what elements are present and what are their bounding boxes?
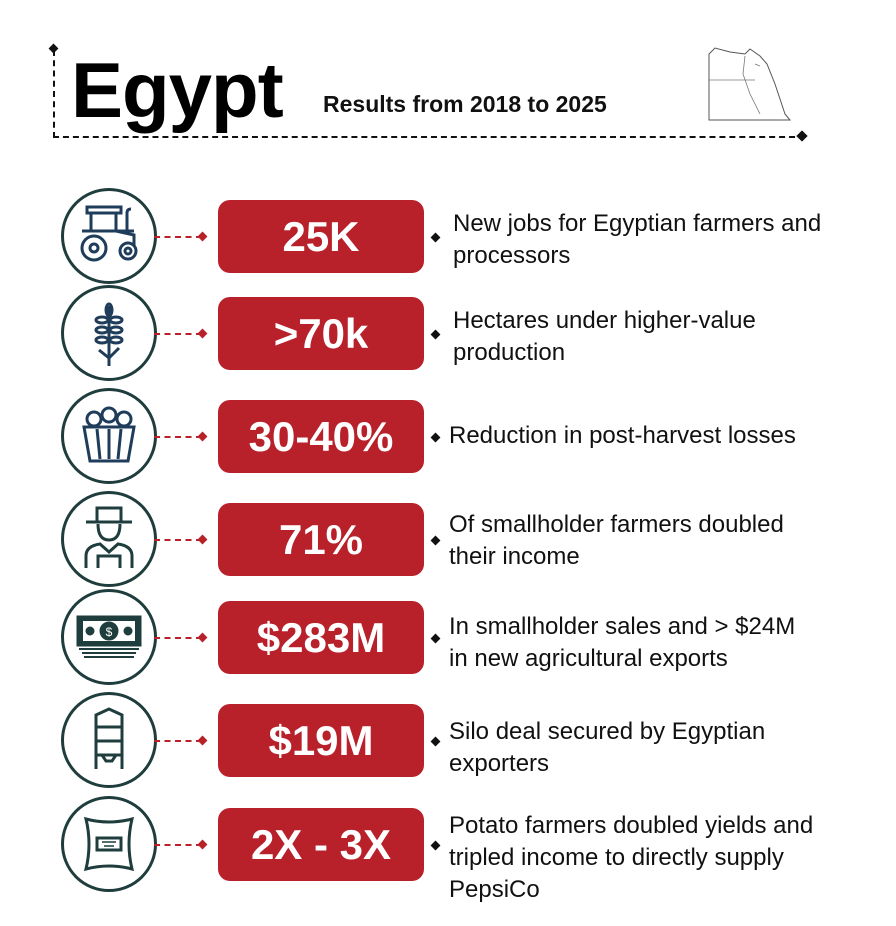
row 5 (61, 589, 795, 685)
text: in new agricultural exports (449, 645, 728, 672)
text: Of smallholder farmers doubled (449, 511, 784, 538)
text: New jobs for Egyptian farmers and (453, 210, 821, 237)
icon: money: $ (106, 625, 113, 639)
stat: 2X - 3X: 2X - 3X (251, 820, 391, 868)
icon: silo (61, 692, 157, 788)
text: Potato farmers doubled yields and (449, 812, 813, 839)
stat: >70k: >70k (274, 310, 368, 356)
row 4 (61, 491, 784, 587)
text: In smallholder sales and > $24M (449, 613, 795, 640)
stat: 71%: 71% (279, 516, 363, 562)
stat: $283M (218, 601, 424, 674)
text (449, 613, 795, 672)
text: processors (453, 242, 570, 269)
stat: 71% (218, 503, 424, 576)
text: Hectares under higher-value (453, 307, 756, 334)
text (449, 812, 813, 903)
text: production (453, 339, 565, 366)
stat: 2X - 3X (218, 808, 424, 881)
icon: basket (61, 388, 157, 484)
text (453, 307, 756, 366)
stat: 25K (218, 200, 424, 273)
row 2 (61, 285, 756, 381)
row 1 (61, 188, 821, 284)
icon: farmer (61, 491, 157, 587)
text: exporters (449, 750, 549, 777)
text: Silo deal secured by Egyptian (449, 718, 765, 745)
stat: $283M: $283M (257, 614, 385, 660)
row 7 (61, 796, 813, 903)
text: PepsiCo (449, 876, 540, 903)
row 3 (61, 388, 796, 484)
row 6 (61, 692, 765, 788)
stat: 25K: 25K (282, 212, 360, 260)
stat: 30-40% (218, 400, 424, 473)
text (453, 210, 821, 269)
text: their income (449, 543, 580, 570)
icon: map of Egypt (708, 48, 791, 120)
icon: wheat (61, 285, 157, 381)
title: Egypt (71, 46, 283, 134)
text (449, 718, 765, 777)
text (449, 511, 784, 570)
icon: money (61, 589, 157, 685)
stat: >70k (218, 297, 424, 370)
header frame (53, 50, 805, 138)
stat: $19M: $19M (268, 716, 374, 764)
text: Reduction in post-harvest losses (449, 422, 796, 449)
icon: sack (61, 796, 157, 892)
text: tripled income to directly supply (449, 844, 784, 871)
stat: $19M (218, 704, 424, 777)
subtitle: Results from 2018 to 2025 (323, 91, 607, 117)
stat: 30-40%: 30-40% (249, 412, 393, 460)
icon: tractor (61, 188, 157, 284)
